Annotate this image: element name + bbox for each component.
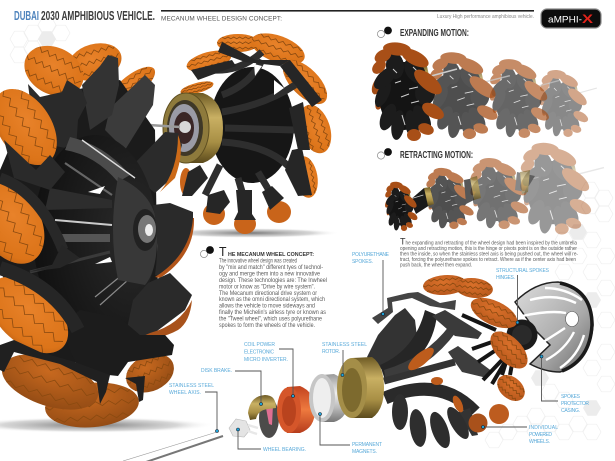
label: permanent magnets: PERMANENT: [352, 442, 382, 448]
coil power micro inverter: [277, 386, 315, 433]
label: coil power electronic micro inverter: COIL POWER: [244, 342, 275, 348]
text block: expanding and retracting: he expanding and retracting of the wheel design had been inspired by the umbrella: [406, 240, 577, 246]
label: polyurethane spokes: SPOKES.: [352, 259, 373, 265]
left tyres: [0, 76, 145, 420]
text block: the mecanum wheel concept: allows the vehicle to move sideways and: [219, 304, 315, 310]
label: stainless steel wheel axis: [169, 383, 218, 432]
text block: expanding and retracting: T: [400, 236, 406, 246]
label: structural spokes hinges: [496, 268, 550, 324]
expanding motion heading: EXPANDING MOTION:: [400, 27, 469, 39]
label: spokes protector casing: CASING.: [561, 408, 580, 414]
label: polyurethane spokes: POLYURETHANE: [352, 252, 390, 258]
right mecanum wheel: [149, 27, 337, 234]
label: coil power electronic micro inverter: MICRO INVERTER.: [244, 357, 288, 363]
text block: the mecanum wheel concept: the "Tweel wheel", which uses polyurethane: [219, 316, 323, 322]
disk brake: [248, 395, 279, 438]
text block: expanding and retracting: push back, the wheel then expand.: [400, 262, 472, 268]
text block: expanding and retracting: opening and retracting motion, this is the hinge or pivots point is on the outside rather: [400, 246, 577, 252]
text block: expanding and retracting: tract, forcing the polyurethane spokes to retract. Where as if the center axis had been: [400, 257, 576, 263]
icon: bullet: [200, 246, 214, 258]
spokes and brackets: [182, 42, 322, 220]
hub disc: [30, 135, 157, 335]
floor shadows: [0, 228, 340, 433]
text block: the mecanum wheel concept: [200, 244, 327, 329]
exploded wheel diagram: [123, 274, 593, 461]
logo: aMPHI-: [548, 14, 582, 26]
label: structural spokes hinges: STRUCTURAL SPOKES: [496, 268, 550, 274]
stainless steel wheel axis: [123, 432, 223, 461]
label: stainless steel wheel axis: STAINLESS STEEL: [169, 383, 214, 389]
subtitle: MECANUM WHEEL DESIGN CONCEPT:: [161, 16, 282, 22]
icon: bullet: [377, 148, 392, 159]
text block: the mecanum wheel concept: known as the omni directional system, which: [219, 297, 325, 303]
logo: X: [582, 12, 593, 26]
text block: the mecanum wheel concept: HE MECANUM WHEEL CONCEPT:: [228, 252, 314, 258]
title: DUBAI: [14, 8, 39, 23]
expanding motion sequence: [369, 41, 597, 141]
text block: the mecanum wheel concept: T: [219, 244, 227, 259]
upper tyres: [15, 36, 161, 112]
gold rotor: [149, 93, 223, 163]
retracting motion sequence: [384, 142, 604, 234]
text block: the mecanum wheel concept: motor or know as "Drive by wire system".: [219, 284, 315, 290]
dark backing mass: [0, 80, 158, 365]
label: wheel bearing: WHEEL BEARING.: [263, 447, 306, 453]
tagline: Luxury High performance amphibious vehicle.: [437, 14, 534, 20]
permanent magnets: [309, 374, 348, 422]
text block: expanding and retracting: then the inside, so when the stainless steel axis is being pushed out, the wheel will re-: [400, 252, 578, 258]
label: stainless steel rotor: ROTOR.: [322, 349, 340, 355]
label: coil power electronic micro inverter: [244, 342, 294, 398]
label: coil power electronic micro inverter: ELECTRONIC: [244, 350, 274, 356]
label: individual powered wheels: [482, 425, 558, 445]
stainless steel rotor: [337, 357, 384, 418]
wheel bearing: [229, 419, 258, 437]
label: individual powered wheels: INDIVIDUAL: [529, 425, 558, 431]
dark spokes and fins: [367, 292, 512, 451]
label: stainless steel rotor: [322, 342, 367, 376]
title: [14, 8, 155, 23]
text block: the mecanum wheel concept: ogy and merge them into a new innovative: [219, 271, 321, 277]
label: spokes protector casing: [540, 355, 589, 414]
tyres: [179, 27, 337, 234]
label: disk brake: [201, 368, 262, 406]
text block: the mecanum wheel concept: The innovative wheel design was created: [219, 258, 297, 264]
retracting motion heading: [377, 148, 473, 161]
upper brackets: [28, 55, 182, 193]
text block: the mecanum wheel concept: finally the Michelin's airless tyre or known as: [219, 310, 326, 316]
label: permanent magnets: [318, 412, 382, 455]
retracting motion heading: RETRACTING MOTION:: [400, 149, 473, 161]
spokes protector casing: [515, 282, 593, 372]
text block: the mecanum wheel concept: by "mix and match" different tyes of technol-: [219, 265, 323, 271]
label: stainless steel wheel axis: WHEEL AXIS.: [169, 390, 201, 396]
label: disk brake: DISK BRAKE.: [201, 368, 232, 374]
structural spokes hinges hub: [506, 320, 538, 350]
label: structural spokes hinges: HINGES.: [496, 275, 515, 281]
title: 2030 AMPHIBIOUS VEHICLE.: [41, 8, 155, 23]
label: polyurethane spokes: [352, 252, 390, 316]
label: individual powered wheels: WHEELS.: [529, 439, 550, 445]
individual powered wheels: [421, 274, 534, 432]
text block: expanding and retracting: [400, 236, 578, 268]
right lower brackets: [41, 203, 194, 431]
label: spokes protector casing: SPOKES: [561, 394, 581, 400]
expanding motion heading: [377, 27, 469, 39]
label: spokes protector casing: PROTECTOR: [561, 401, 589, 407]
logo: [541, 9, 601, 28]
label: individual powered wheels: POWERED: [529, 432, 552, 438]
text block: the mecanum wheel concept: design. These technologies are: The Inwheel: [219, 278, 327, 284]
icon: bullet: [377, 27, 392, 38]
label: wheel bearing: [236, 428, 306, 453]
left large mecanum wheel: [0, 36, 194, 431]
label: stainless steel rotor: STAINLESS STEEL: [322, 342, 367, 348]
label: permanent magnets: MAGNETS.: [352, 449, 377, 455]
text block: the mecanum wheel concept: The Mecanum directional drive system or: [219, 291, 317, 297]
text block: the mecanum wheel concept: spokes to form the wheels of the vehicle.: [219, 323, 315, 329]
